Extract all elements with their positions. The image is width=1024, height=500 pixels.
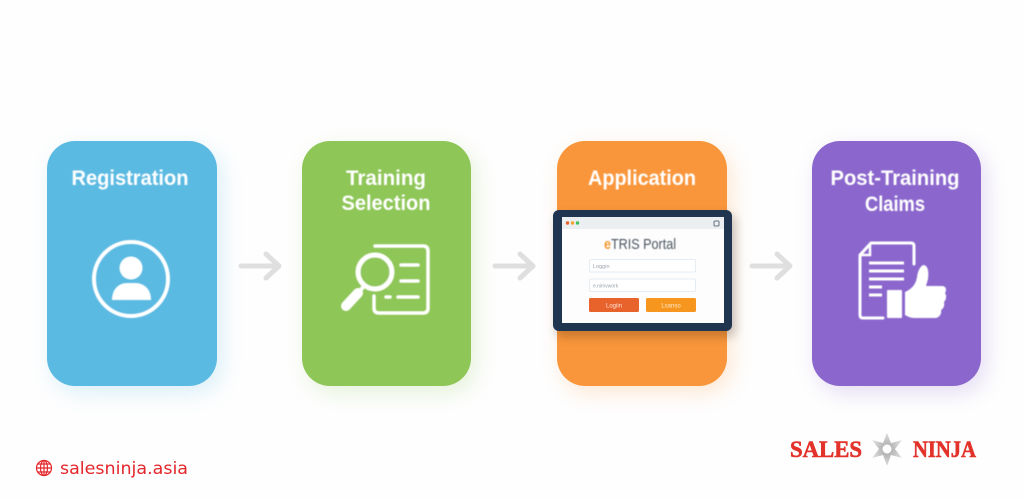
website text: salesninja.asia [60, 459, 188, 479]
logo icon: shuriken [872, 433, 902, 466]
portal title: eTRIS Portal [604, 237, 676, 253]
panel: registration [47, 141, 222, 393]
heading: registration: Registration [72, 167, 188, 190]
logo word: ninja: NINJA [913, 437, 976, 463]
logo: sales ninja [790, 433, 976, 466]
login button [589, 298, 639, 312]
logo word: sales: SALES [790, 437, 862, 463]
tablet: eTRIS portal login [553, 210, 736, 337]
icon: globe [36, 460, 52, 476]
panel: application [553, 141, 736, 393]
arrow: training selection to application [495, 254, 533, 278]
heading: post-training: Post-Training [830, 167, 960, 190]
icon: document with thumbs up [860, 243, 946, 318]
icon: magnifier over document [346, 246, 428, 313]
browser toolbar [562, 217, 724, 229]
password field: e.nimvwork [593, 284, 619, 290]
heading: application: Application [588, 167, 696, 190]
password field [590, 279, 696, 292]
icon: user profile [94, 242, 168, 316]
website link [36, 459, 188, 479]
heading line two: claims: Claims [865, 193, 925, 216]
panel: post-training claims [812, 141, 986, 393]
username field [590, 260, 696, 272]
heading line two: training selection: Selection [342, 192, 430, 215]
panel: training selection [302, 141, 476, 393]
secondary button [646, 298, 696, 312]
arrow: application to claims [752, 254, 790, 278]
login button: Logiin [606, 304, 622, 310]
arrow: registration to training selection [241, 254, 279, 278]
username field: Loggin [593, 264, 610, 270]
secondary button: Lsanso [661, 304, 681, 310]
heading: training selection: Training [346, 167, 426, 190]
